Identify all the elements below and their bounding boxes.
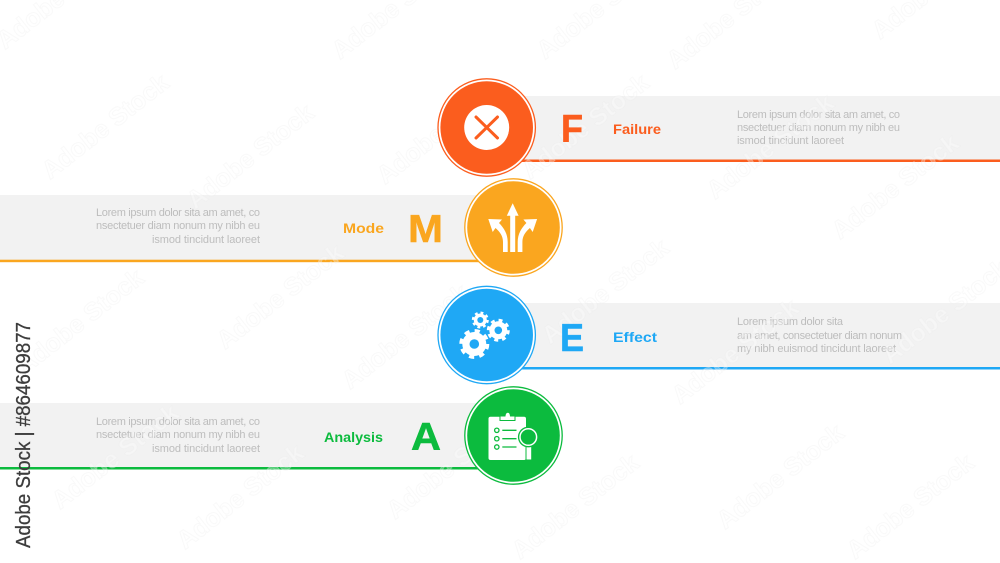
text block Mode: Lorem ipsum dolor sita am amet, co	[96, 207, 260, 219]
label Failure: Failure	[613, 121, 661, 137]
watermark pattern: Adobe Stock	[826, 129, 964, 245]
watermark pattern: Adobe Stock	[536, 234, 674, 350]
text block Mode: nsectetuer diam nonum my nibh eu	[96, 220, 260, 232]
text block Analysis: Lorem ipsum dolor sita am amet, co	[96, 416, 260, 428]
icon: Failure circle with cross	[438, 79, 535, 176]
watermark pattern: Adobe Stock	[666, 294, 804, 410]
icon: Effect circle with gears	[438, 286, 535, 384]
text block Failure: ismod tincidunt laoreet	[737, 135, 844, 147]
letter A: A	[411, 416, 441, 459]
label Mode: Mode	[343, 220, 384, 236]
watermark pattern: Adobe Stock	[381, 409, 519, 525]
panel: Failure band	[510, 96, 1000, 162]
text block Failure	[737, 109, 900, 147]
watermark pattern: Adobe Stock	[11, 264, 149, 380]
watermark pattern: Adobe Stock	[211, 239, 349, 355]
label Effect: Effect	[613, 329, 657, 345]
watermark pattern: Adobe Stock	[841, 449, 979, 563]
watermark pattern: Adobe Stock	[181, 99, 319, 215]
icon: Analysis circle with clipboard and magnifier	[465, 387, 562, 484]
label Analysis: Analysis	[324, 429, 383, 445]
watermark pattern: Adobe Stock	[171, 439, 309, 555]
letter F: F	[561, 108, 583, 151]
icon: Mode circle with three arrows	[465, 179, 562, 276]
watermark pattern: Adobe Stock	[371, 74, 509, 190]
watermark pattern: Adobe Stock	[46, 399, 184, 515]
text block Mode: ismod tincidunt laoreet	[152, 234, 260, 246]
stock credit vertical text: Adobe Stock | #864609877	[13, 322, 35, 548]
text block Effect: am amet, consectetuer diam nonum	[737, 330, 902, 342]
text block Effect: Lorem ipsum dolor sita	[737, 316, 844, 328]
watermark pattern: Adobe Stock	[701, 89, 839, 205]
letter E: E	[560, 317, 584, 360]
watermark pattern: Adobe Stock	[36, 69, 174, 185]
watermark pattern: Adobe Stock	[506, 449, 644, 563]
text block Mode	[96, 207, 260, 246]
watermark pattern: Adobe Stock	[336, 279, 474, 395]
text block Analysis: ismod tincidunt laoreet	[152, 443, 260, 455]
text block Failure: nsectetuer diam nonum my nibh eu	[737, 122, 900, 134]
letter M: M	[408, 208, 443, 251]
panel: Mode band	[0, 195, 490, 262]
text block Analysis: nsectetuer diam nonum my nibh eu	[96, 429, 260, 441]
text block Effect: my nibh euismod tincidunt laoreet	[737, 343, 896, 355]
text block Effect	[737, 316, 902, 355]
panel: Effect band	[510, 303, 1000, 370]
text block Analysis	[96, 416, 260, 455]
watermark pattern: Adobe Stock	[711, 419, 849, 535]
panel: Analysis band	[0, 403, 490, 470]
text block Failure: Lorem ipsum dolor sita am amet, co	[737, 109, 900, 121]
watermark pattern: Adobe Stock	[516, 69, 654, 185]
